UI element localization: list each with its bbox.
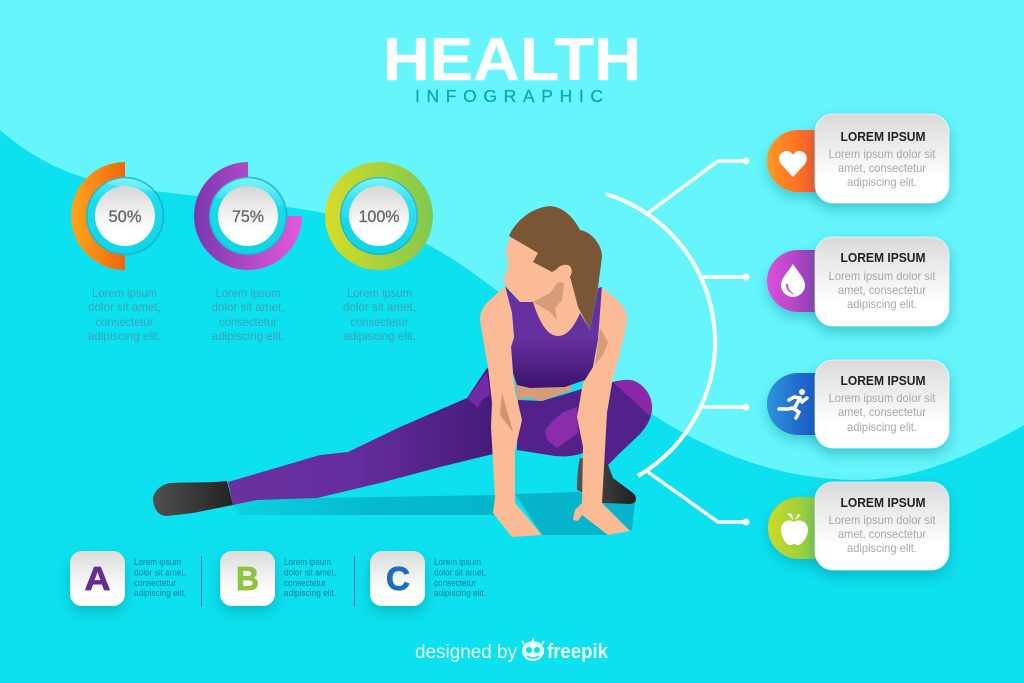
panel: card nutrition (768, 482, 949, 570)
caption: consectetur (219, 315, 277, 329)
icon: freepik mascot (522, 638, 544, 661)
extended leg (228, 368, 500, 505)
panel: option B (220, 551, 336, 606)
percent dial (349, 186, 409, 246)
card text: amet, consectetur (838, 283, 926, 297)
value: 50% (108, 207, 142, 226)
belly (515, 383, 572, 401)
value: 100% (358, 207, 400, 226)
credit: designed by freepik (415, 638, 609, 663)
card title: LOREM IPSUM (840, 374, 926, 388)
card text: adipiscing elit. (847, 297, 917, 311)
heading: HEALTH: HEALTH (383, 26, 641, 93)
caption: adipiscing elit. (343, 329, 416, 343)
caption: Lorem ipsum (347, 286, 412, 300)
neck and chest (520, 277, 586, 342)
credit text: designed by (415, 642, 517, 663)
rear shoe (577, 458, 636, 504)
ear (555, 265, 572, 282)
icon tab (767, 250, 835, 312)
tile (220, 551, 275, 606)
glass disc (210, 178, 286, 254)
card title: LOREM IPSUM (840, 496, 926, 510)
credit brand: freepik (547, 641, 609, 663)
text: adipiscing elit. (284, 588, 336, 599)
card text: Lorem ipsum dolor sit (828, 391, 936, 405)
front shoe (153, 481, 233, 516)
face (503, 238, 572, 302)
panel: card running (767, 360, 949, 448)
panel: progress donut 50% (79, 170, 164, 343)
letter: B (236, 560, 259, 597)
text: adipiscing elit. (434, 588, 486, 599)
knee highlight (545, 407, 578, 448)
bent leg highlight (613, 380, 652, 416)
card title: LOREM IPSUM (840, 130, 926, 144)
title (383, 26, 641, 106)
illustration: stretching woman (153, 206, 652, 537)
panel: progress donut 75% (202, 170, 294, 343)
tile (370, 551, 425, 606)
icon tab (768, 497, 835, 559)
right arm (573, 287, 630, 535)
panel: progress donut 100% (332, 170, 426, 343)
caption: consectetur (96, 315, 154, 329)
right arm shadow (595, 328, 608, 365)
card (815, 114, 949, 203)
text: dolor sit amet, (134, 568, 186, 578)
icon: water drop (781, 264, 805, 297)
card text: Lorem ipsum dolor sit (828, 513, 936, 527)
floor shadow left (233, 495, 495, 515)
caption: consectetur (350, 315, 408, 329)
text: consectetur (284, 578, 326, 589)
caption: Lorem ipsum (92, 286, 157, 300)
text: Lorem ipsum (284, 557, 331, 568)
text: adipiscing elit. (134, 588, 186, 599)
panel: card heart (767, 114, 949, 203)
card text: amet, consectetur (838, 405, 926, 419)
icon tab (767, 130, 835, 192)
connector arc and lines (606, 158, 750, 526)
glass disc (86, 178, 164, 254)
card text: adipiscing elit. (847, 541, 917, 555)
text: Lorem ipsum (134, 557, 181, 568)
caption: dolor sit amet, (212, 300, 284, 314)
caption: adipiscing elit. (212, 329, 284, 343)
glass disc (340, 178, 418, 254)
icon: heart (779, 151, 807, 177)
card text: Lorem ipsum dolor sit (828, 147, 936, 161)
card title: LOREM IPSUM (840, 251, 926, 265)
icon: runner (779, 389, 807, 418)
card (815, 482, 949, 570)
panel: option C (370, 551, 486, 606)
icon tab (767, 373, 835, 435)
text: consectetur (434, 578, 476, 589)
caption: dolor sit amet, (343, 300, 416, 314)
panel: option A (70, 551, 186, 606)
text: dolor sit amet, (284, 568, 336, 578)
bent leg (517, 380, 652, 465)
card text: amet, consectetur (838, 161, 926, 175)
percent dial (95, 186, 155, 246)
ponytail and hair (509, 206, 602, 330)
letter: A (84, 560, 110, 597)
neck shadow (533, 282, 564, 320)
donut ring (202, 170, 294, 262)
card text: adipiscing elit. (847, 420, 917, 434)
subheading: INFOGRAPHIC: INFOGRAPHIC (415, 86, 603, 106)
caption: dolor sit amet, (88, 300, 161, 314)
text: Lorem ipsum (434, 557, 481, 568)
donut ring (79, 170, 125, 262)
caption: Lorem ipsum (216, 286, 281, 300)
thigh fold (467, 372, 490, 408)
percent dial (218, 186, 278, 246)
letter: C (386, 560, 410, 597)
card text: amet, consectetur (838, 527, 926, 541)
donut ring (332, 170, 426, 262)
floor shadow right (515, 492, 635, 535)
card text: adipiscing elit. (847, 175, 917, 189)
card text: Lorem ipsum dolor sit (828, 269, 936, 283)
sports top (505, 286, 602, 388)
left arm shadow (500, 393, 513, 432)
value: 75% (232, 207, 264, 226)
text: consectetur (134, 578, 176, 589)
icon: apple (781, 513, 808, 545)
left arm (480, 286, 542, 537)
caption: adipiscing elit. (88, 329, 161, 343)
card (815, 237, 949, 326)
tile (70, 551, 125, 606)
text: dolor sit amet, (434, 568, 486, 578)
panel: card water (767, 237, 949, 326)
card (815, 360, 949, 448)
